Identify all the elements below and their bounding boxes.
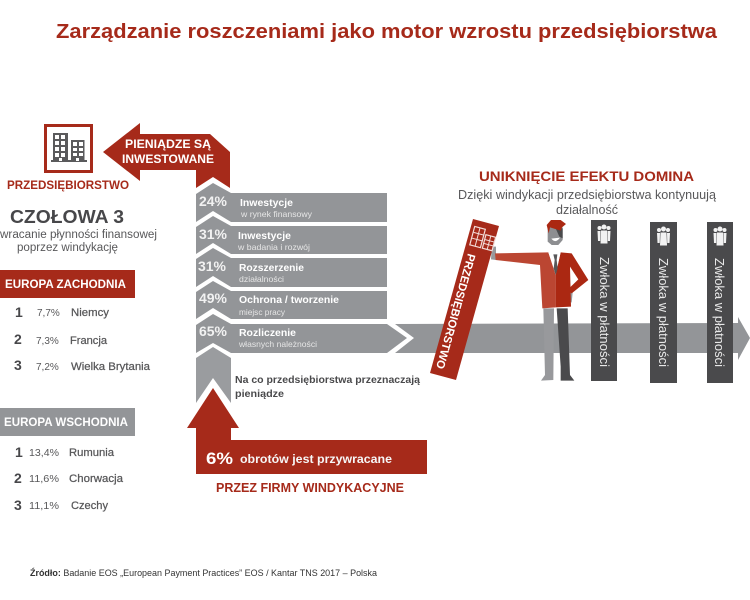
panel: payment delay 1: Zwłoka w płatności (597, 257, 611, 367)
row: 65% (196, 314, 407, 353)
panel: falling company tile: PRZEDSIĘBIORSTWO (433, 252, 477, 370)
panel: western Europe: 1 (15, 304, 23, 320)
panel: eastern Europe: Chorwacja (69, 473, 124, 485)
row: 31% expansion: działalności (239, 274, 284, 284)
text: top 3 description: wracanie płynności finansowej (0, 229, 157, 241)
panel: eastern Europe: 11,6% (29, 474, 59, 485)
panel: eastern Europe: EUROPA WSCHODNIA (4, 417, 128, 429)
text: what companies spend on: pieniądze (235, 389, 284, 400)
text: what companies spend on: Na co przedsiębiorstwa przeznaczają (235, 375, 420, 386)
row: 31% research: w badania i rozwój (237, 242, 310, 252)
panel: western Europe (0, 270, 151, 373)
panel: western Europe: Francja (70, 335, 108, 347)
arrow: long grey timeline (395, 317, 750, 360)
row: 31% expansion: Rozszerzenie (239, 262, 304, 274)
panel: payment delay 3: Zwłoka w płatności (712, 258, 726, 367)
icon: people (598, 224, 610, 244)
row: 24% (196, 183, 387, 222)
panel: eastern Europe: Rumunia (69, 447, 115, 459)
text: what companies spend on (235, 375, 420, 400)
label: debt collection firms: PRZEZ FIRMY WINDYKACYJNE (216, 481, 404, 495)
row: 65%: Rozliczenie (239, 327, 296, 339)
icon: people (657, 226, 670, 246)
heading: top 3: CZOŁOWA 3 (10, 207, 124, 227)
row: 31% expansion (196, 248, 387, 287)
text: domino description: Dzięki windykacji przedsiębiorstwa kontynuują (458, 188, 716, 202)
panel: eastern Europe: 3 (14, 497, 22, 513)
panel: western Europe: EUROPA ZACHODNIA (5, 279, 126, 291)
arrow: 6% of turnover (187, 388, 427, 474)
text: top 3 description: poprzez windykację (17, 242, 118, 254)
row: 49%: miejsc pracy (239, 307, 286, 317)
panel: payment delay 3 (707, 222, 733, 383)
text: domino description (458, 188, 716, 217)
text: top 3 description (0, 229, 157, 254)
row: 65%: własnych należności (238, 339, 317, 349)
panel: western Europe: 7,3% (36, 336, 59, 347)
illustration: man holding the company (491, 220, 588, 381)
arrow: money is invested: INWESTOWANE (122, 152, 214, 166)
panel: western Europe: 3 (14, 357, 22, 373)
row: 24%: 24% (199, 193, 228, 209)
company label: PRZEDSIĘBIORSTWO (7, 180, 129, 192)
icon: people (714, 226, 726, 246)
row: 49% (196, 281, 387, 319)
panel: eastern Europe: 11,1% (29, 501, 59, 512)
row: 24%: Inwestycje (240, 197, 293, 209)
row: 31% expansion: 31% (198, 258, 227, 274)
panel: western Europe: 2 (14, 331, 22, 347)
arrow: 6% of turnover: obrotów jest przywracane (240, 454, 392, 466)
panel: western Europe: 7,2% (36, 362, 59, 373)
panel: eastern Europe: 1 (15, 444, 23, 460)
row: 31% research: 31% (199, 226, 228, 242)
arrow: money is invested: PIENIĄDZE SĄ (125, 137, 211, 151)
text: domino description: działalność (556, 203, 618, 217)
panel: eastern Europe: Czechy (71, 500, 108, 512)
panel: payment delay 1 (591, 220, 617, 381)
row: 49%: Ochrona / tworzenie (239, 294, 339, 306)
panel: eastern Europe: 2 (14, 470, 22, 486)
panel: eastern Europe (0, 408, 135, 513)
panel: payment delay 2 (650, 222, 677, 383)
title: Zarządzanie roszczeniami jako motor wzrostu przedsiębiorstwa (56, 21, 718, 43)
row: 49%: 49% (199, 290, 228, 306)
arrow: bottom grey chevron (196, 347, 231, 403)
panel: eastern Europe: 13,4% (29, 448, 59, 459)
panel: falling company tile (430, 219, 499, 380)
panel: company and top 3 (0, 126, 157, 513)
arrow: 6% of turnover: 6% (206, 449, 233, 468)
panel: western Europe: Wielka Brytania (71, 361, 151, 373)
source note: Źródło: Badanie EOS „European Payment Practices” EOS / Kantar TNS 2017 – Polska (30, 568, 378, 579)
arrow: money is invested (103, 123, 230, 188)
chart: use of money chevrons (196, 183, 407, 403)
panel: payment delay 2: Zwłoka w płatności (656, 258, 670, 367)
row: 31% research: Inwestycje (238, 230, 291, 242)
heading: domino effect: UNIKNIĘCIE EFEKTU DOMINA (479, 168, 694, 184)
panel: western Europe: Niemcy (71, 307, 110, 319)
icon: company building (46, 126, 92, 172)
row: 24%: w rynek finansowy (240, 209, 313, 219)
panel: western Europe: 7,7% (37, 308, 60, 319)
row: 31% research (196, 216, 387, 254)
icon: tile building (470, 226, 497, 251)
row: 65%: 65% (199, 323, 228, 339)
